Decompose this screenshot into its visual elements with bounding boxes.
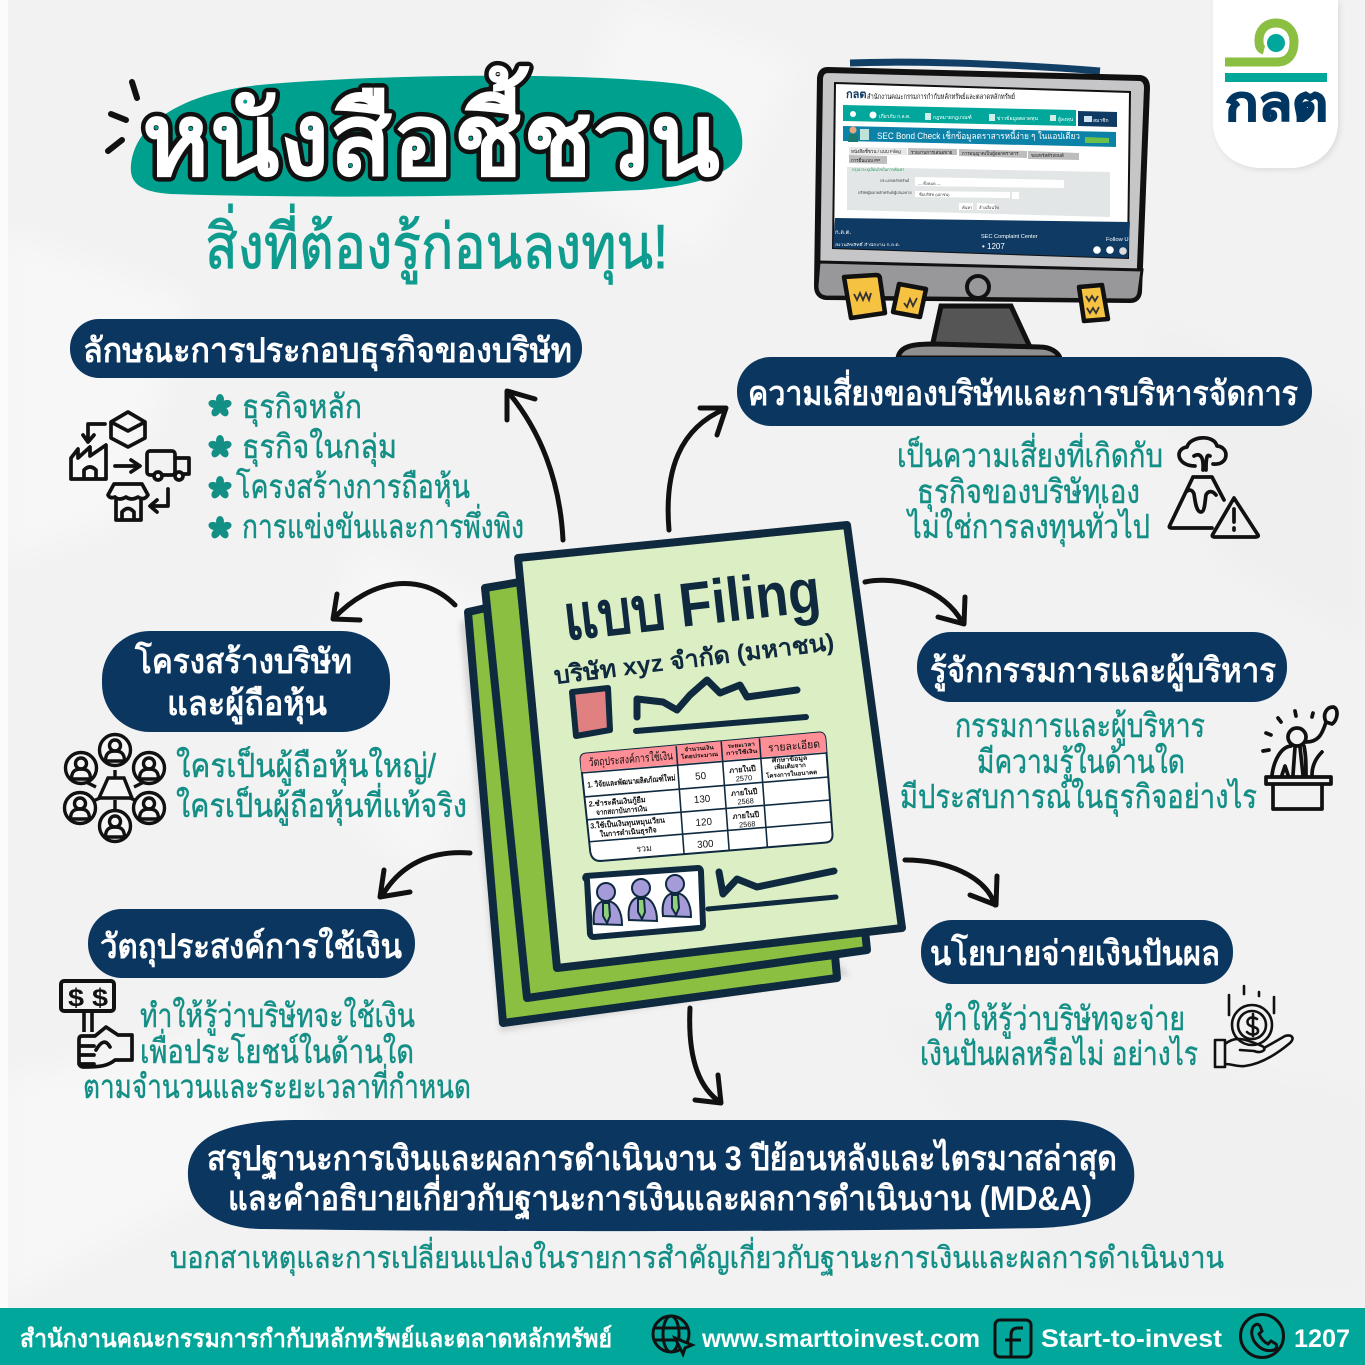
website text: สงวนลิขสิทธิ์ สำนักงาน ก.ล.ต. bbox=[835, 241, 900, 247]
purposes table: 2.ชำระคืนเงินกู้ยืม bbox=[588, 795, 646, 810]
text block: มีประสบการณ์ในธุรกิจอย่างไร bbox=[900, 778, 1257, 817]
website text: ข่าวข้อมูลตลาดทุน bbox=[997, 115, 1038, 122]
heading: ลักษณะการประกอบธุรกิจของบริษัท bbox=[83, 332, 572, 372]
heading bbox=[737, 357, 1312, 426]
bullet list: โครงสร้างการถือหุ้น bbox=[236, 468, 470, 507]
purposes table: โครงการในอนาคต bbox=[765, 768, 817, 780]
text block: ไม่ใช่การลงทุนทั่วไป bbox=[906, 504, 1150, 547]
heading bbox=[921, 920, 1233, 984]
text block: ทำให้รู้ว่าบริษัทจะใช้เงิน bbox=[140, 997, 415, 1036]
monitor body bbox=[850, 62, 1100, 71]
logo: SEC Thailand tab bbox=[1213, 0, 1340, 170]
icon: phone bbox=[1240, 1314, 1284, 1358]
subtitle: สิ่งที่ต้องรู้ก่อนลงทุน! bbox=[205, 204, 668, 284]
logo: SEC Thailand tab: กลต bbox=[1225, 78, 1328, 131]
panel: financial summary and MD&A bbox=[170, 1120, 1224, 1277]
purposes table: โดยประมาณ bbox=[679, 750, 718, 761]
hotline: 1207 bbox=[1294, 1325, 1350, 1353]
website text bbox=[835, 89, 1129, 251]
website text: ผู้ลงทุน bbox=[1058, 116, 1074, 123]
purposes table: 3.ใช้เป็นเงินทุนหมุนเวียน bbox=[590, 814, 666, 831]
text block: เงินปันผลหรือไม่ อย่างไร bbox=[920, 1035, 1198, 1072]
website text: ของทรัสต์รถยนต์ bbox=[1031, 152, 1064, 158]
arrow: to use of funds section bbox=[380, 853, 470, 897]
website text: กรุณาระบุเงื่อนไขในการค้นหา bbox=[852, 167, 904, 173]
bullet list: ธุรกิจหลัก bbox=[242, 388, 362, 427]
website text: ค้นหา bbox=[962, 205, 972, 210]
website text: รายงานการเสนอขาย bbox=[911, 150, 953, 155]
heading: สรุปฐานะการเงินและผลการดำเนินงาน 3 ปีย้อนหลังและไตรมาสล่าสุด bbox=[207, 1138, 1117, 1181]
purposes table: ศึกษาข้อมูล bbox=[771, 754, 808, 766]
purposes table bbox=[580, 732, 833, 862]
icon: hand holding dollar sign bbox=[61, 981, 132, 1067]
heading bbox=[88, 909, 415, 978]
heading: และคำอธิบายเกี่ยวกับฐานะการเงินและผลการดำเนินงาน (MD&A) bbox=[228, 1174, 1092, 1221]
text block: เพื่อประโยชน์ในด้านใด bbox=[140, 1029, 414, 1070]
heading: นโยบายจ่ายเงินปันผล bbox=[930, 933, 1220, 973]
panel: use of funds bbox=[61, 909, 471, 1105]
purposes table: 1. วิจัยและพัฒนาผลิตภัณฑ์ใหม่ bbox=[587, 772, 676, 790]
sticky notes bbox=[844, 275, 885, 318]
purposes table: 2568 bbox=[739, 819, 756, 830]
text block: ทำให้รู้ว่าบริษัทจะจ่าย bbox=[935, 1000, 1185, 1039]
purposes table: ในการดำเนินธุรกิจ bbox=[599, 825, 657, 839]
icon: speaker at podium bbox=[1263, 707, 1337, 809]
icon: supply chain bbox=[71, 412, 189, 520]
text block: กรรมการและผู้บริหาร bbox=[955, 707, 1205, 746]
icon: globe with cursor bbox=[653, 1316, 692, 1354]
heading: รู้จักกรรมการและผู้บริหาร bbox=[930, 652, 1277, 692]
text block: ตามจำนวนและระยะเวลาที่กำหนด bbox=[83, 1064, 471, 1105]
footer bar bbox=[0, 1308, 1365, 1365]
website text: สมาชิก bbox=[1093, 117, 1109, 124]
purposes table: วัตถุประสงค์การใช้เงิน bbox=[588, 748, 674, 769]
purposes table: 130 bbox=[694, 794, 711, 806]
text block bbox=[897, 433, 1163, 547]
bullet list: ธุรกิจในกลุ่ม bbox=[242, 428, 397, 467]
facebook page: Start-to-invest bbox=[1041, 1325, 1223, 1353]
purposes table: ภายในปี bbox=[732, 810, 760, 821]
icon: volcano warning bbox=[1169, 438, 1258, 537]
purposes table: 300 bbox=[697, 839, 714, 851]
text block: เป็นความเสี่ยงที่เกิดกับ bbox=[897, 433, 1163, 474]
title: main heading on teal blob: หนังสือชี้ชวน bbox=[142, 65, 720, 197]
website text: การยื่นแบบ PP bbox=[851, 157, 880, 163]
website text: SEC Complaint Center bbox=[981, 234, 1038, 240]
website text: ก.ล.ต. bbox=[835, 230, 852, 236]
heading: วัตถุประสงค์การใช้เงิน bbox=[100, 926, 402, 968]
website text: เกี่ยวกับ ก.ล.ต. bbox=[879, 113, 911, 120]
heading bbox=[917, 632, 1287, 702]
text block bbox=[83, 997, 471, 1105]
website text: ล้างเงื่อนไข bbox=[979, 205, 999, 210]
purposes table: 2568 bbox=[737, 796, 754, 807]
website text: Follow U bbox=[1106, 237, 1129, 243]
website screen bbox=[833, 83, 1130, 258]
purposes table: จำนวนเงิน bbox=[684, 744, 714, 754]
text block bbox=[900, 707, 1257, 817]
panel: risks bbox=[737, 357, 1312, 547]
bullet list bbox=[207, 388, 524, 545]
text block bbox=[176, 746, 467, 826]
website text: การอนุญาตเป็นผู้ออกตราสาร bbox=[962, 149, 1019, 157]
purposes table: 2570 bbox=[735, 773, 752, 784]
website: www.smarttoinvest.com bbox=[701, 1325, 980, 1353]
organisation name: สำนักงานคณะกรรมการกำกับหลักทรัพย์และตลาดหลักทรัพย์ bbox=[20, 1324, 612, 1353]
website text: • 1207 bbox=[982, 242, 1005, 251]
arrow: to directors section bbox=[865, 580, 965, 624]
website text: ประเภทหลักทรัพย์ bbox=[880, 178, 909, 183]
heading bbox=[188, 1120, 1134, 1231]
illustration: Filing document stack bbox=[460, 525, 902, 1032]
purposes table: รวม bbox=[636, 843, 652, 854]
arrow: to business section bbox=[507, 391, 563, 540]
monitor stand bbox=[932, 306, 1030, 347]
website text: สำนักงานคณะกรรมการกำกับหลักทรัพย์และตลาดหลักทรัพย์ bbox=[867, 92, 1015, 101]
text block bbox=[920, 1000, 1198, 1072]
website text: หนังสือชี้ชวน / แบบ Filing bbox=[851, 148, 901, 154]
scribble lines bbox=[637, 680, 797, 717]
illustration: computer monitor with SEC website bbox=[817, 62, 1147, 358]
icon: hand holding dollar sign: $ $ bbox=[68, 984, 108, 1012]
purposes table: รายละเอียด bbox=[768, 737, 820, 755]
icon: coin falling to hand bbox=[1215, 986, 1292, 1067]
red photo box bbox=[572, 688, 610, 736]
website text: บริษัทผู้ออกหลักทรัพย์/ผู้เสนอขาย bbox=[858, 190, 912, 195]
people photo box bbox=[585, 868, 703, 937]
website text: ชื่อบริษัท (เอกชน) bbox=[919, 192, 950, 197]
purposes table: ภายในปี bbox=[729, 764, 756, 775]
icon: shareholder network bbox=[64, 734, 164, 842]
arrow: to financial summary section bbox=[690, 1008, 721, 1103]
heading: และผู้ถือหุ้น bbox=[167, 685, 327, 725]
description: บอกสาเหตุและการเปลี่ยนแปลงในรายการสำคัญเกี่ยวกับฐานะการเงินและผลการดำเนินงาน bbox=[170, 1237, 1224, 1277]
panel: business characteristics bbox=[70, 319, 582, 545]
document company name: บริษัท xyz จำกัด (มหาชน) bbox=[552, 629, 836, 690]
heading: โครงสร้างบริษัท bbox=[134, 641, 352, 681]
website text: --- ทั้งหมด --- bbox=[918, 179, 941, 186]
icon: facebook bbox=[995, 1320, 1031, 1357]
website text: SEC Bond Check เช็กข้อมูลตราสารหนี้ง่าย ๆ ในแอปเดียว bbox=[877, 129, 1080, 142]
purposes table: ระยะเวลา bbox=[727, 741, 755, 750]
panel: directors and executives bbox=[900, 632, 1337, 817]
purposes table: เพิ่มเติมจาก bbox=[774, 760, 806, 771]
heading bbox=[70, 319, 582, 378]
text block: ธุรกิจของบริษัทเอง bbox=[917, 473, 1140, 512]
purposes table: 50 bbox=[695, 771, 707, 783]
purposes table: การใช้เงิน bbox=[726, 747, 758, 757]
arrow: to dividend section bbox=[905, 860, 997, 905]
panel: dividend policy bbox=[920, 920, 1292, 1072]
heading: ความเสี่ยงของบริษัทและการบริหารจัดการ bbox=[748, 369, 1299, 413]
document title: แบบ Filing bbox=[560, 556, 824, 654]
bullet list: การแข่งขันและการพึ่งพิง bbox=[242, 504, 524, 545]
purposes table: ภายในปี bbox=[731, 787, 758, 798]
panel: company structure and shareholders bbox=[64, 631, 467, 842]
text block: มีความรู้ในด้านใด bbox=[977, 743, 1185, 782]
website text: กลต bbox=[846, 89, 867, 101]
text block: ใครเป็นผู้ถือหุ้นใหญ่/ bbox=[176, 746, 437, 786]
purposes table: จากสถาบันการเงิน bbox=[596, 804, 648, 817]
heading bbox=[102, 631, 390, 732]
text block: ใครเป็นผู้ถือหุ้นที่แท้จริง bbox=[176, 783, 467, 826]
purposes table: 120 bbox=[695, 817, 713, 829]
arrows from document to each section bbox=[333, 391, 997, 1103]
website text: กฎหมายกฎเกณฑ์ bbox=[933, 114, 972, 121]
arrow: to structure section bbox=[333, 583, 455, 620]
arrow: to risk section bbox=[668, 408, 726, 530]
